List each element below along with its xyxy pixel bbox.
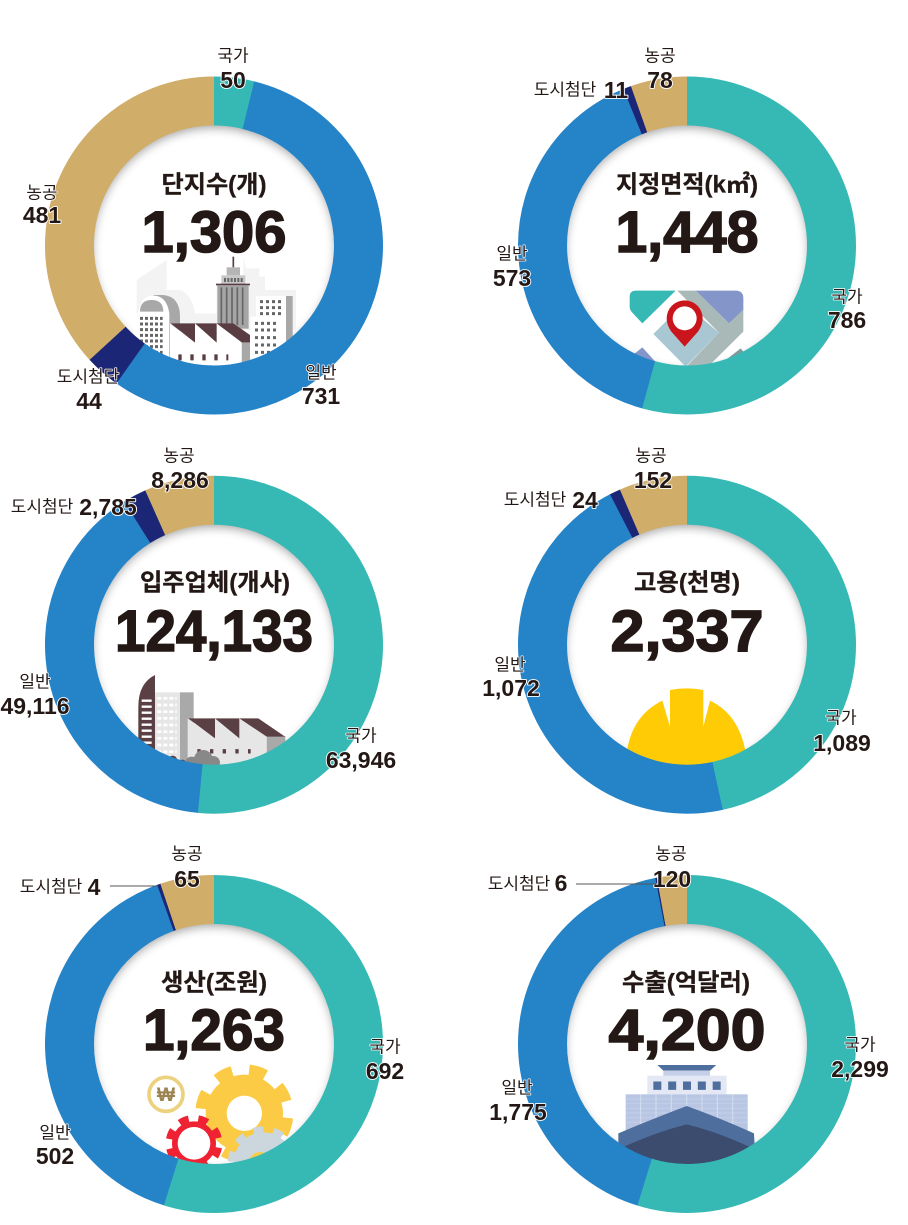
- label: 도시첨단: 2,785: [79, 494, 137, 520]
- label: 국가: 국가: [825, 704, 857, 728]
- label: 도시첨단: [504, 486, 598, 513]
- leader line: 도시첨단: [576, 883, 656, 885]
- label: 농공: 481: [23, 202, 61, 228]
- label: 국가: 2,299: [831, 1056, 889, 1082]
- label: 국가: [828, 282, 866, 333]
- label: 일반: 일반: [39, 1118, 71, 1144]
- label: 일반: 일반: [496, 240, 528, 264]
- label: 일반: [489, 1074, 547, 1125]
- label: 도시첨단: [11, 492, 137, 520]
- label: 일반: [302, 358, 340, 409]
- label: 농공: [653, 840, 691, 892]
- label: 도시첨단: [534, 76, 628, 103]
- panel: 고용 donut: [482, 442, 871, 789]
- label: 농공: 농공: [163, 442, 195, 466]
- label: 농공: [171, 840, 203, 892]
- label: 일반: 일반: [501, 1074, 533, 1098]
- label: 도시첨단: 도시첨단: [534, 76, 597, 100]
- label: 국가: [217, 42, 249, 93]
- title: 생산(조원): [161, 970, 267, 996]
- label: 농공: 농공: [655, 840, 687, 864]
- icon: city and factory: [133, 257, 296, 367]
- label: 국가: 국가: [345, 722, 377, 746]
- label: 도시첨단: 6: [555, 870, 567, 896]
- label: 일반: 731: [302, 383, 340, 409]
- label: 일반: 1,072: [482, 675, 540, 701]
- label: 도시첨단: 44: [76, 388, 102, 414]
- icon: gears and won coin: [149, 1066, 295, 1193]
- label: 도시첨단: 도시첨단: [11, 492, 74, 518]
- label: 국가: [831, 1030, 889, 1082]
- label: 도시첨단: 도시첨단: [57, 362, 120, 388]
- label: 국가: 63,946: [326, 747, 396, 773]
- inner disc with shadow: [94, 125, 334, 366]
- label: 농공: 농공: [644, 42, 676, 66]
- title: 입주업체(개사): [140, 570, 290, 596]
- label: 농공: 65: [174, 866, 200, 892]
- label: 도시첨단: 도시첨단: [488, 870, 551, 894]
- label: 국가: [366, 1032, 404, 1084]
- label: 일반: 일반: [305, 358, 337, 384]
- donut ring: [542, 500, 832, 789]
- donut ring: [70, 900, 358, 1188]
- total value: 124,133: [115, 599, 313, 664]
- label: 도시첨단: 도시첨단: [20, 872, 83, 898]
- label: 농공: 152: [634, 467, 672, 493]
- label: 도시첨단: 4: [88, 874, 101, 900]
- title: 지정면적(k㎡): [616, 170, 758, 198]
- donut ring: [70, 101, 358, 390]
- inner disc with shadow: [566, 524, 808, 765]
- label: 농공: 8,286: [151, 467, 209, 493]
- total value: 2,337: [610, 599, 764, 664]
- label: 국가: 국가: [831, 282, 863, 308]
- label: 일반: [36, 1118, 74, 1169]
- donut ring: [542, 900, 832, 1188]
- label: 국가: 국가: [217, 42, 249, 66]
- label: 농공: [151, 442, 209, 493]
- inner disc with shadow: [566, 924, 808, 1164]
- donut ring: [542, 101, 832, 390]
- label: 국가: 국가: [369, 1032, 401, 1058]
- label: 국가: 692: [366, 1058, 404, 1084]
- panel: 생산 donut: [20, 840, 404, 1193]
- total value: 4,200: [608, 998, 766, 1063]
- panel: 입주업체 donut: [0, 442, 396, 789]
- icon: factory and tower: [138, 675, 285, 770]
- label: 국가: 786: [828, 307, 866, 333]
- title: 수출(억달러): [622, 970, 750, 996]
- inner disc with shadow: [566, 125, 808, 366]
- icon: gears and won coin: ₩: [157, 1085, 176, 1106]
- label: 도시첨단: 도시첨단: [504, 486, 567, 510]
- title: 고용(천명): [634, 570, 740, 596]
- donut ring: [70, 500, 358, 789]
- label: 일반: [0, 668, 70, 719]
- inner disc with shadow: [94, 924, 334, 1164]
- panel: 단지수 donut: [23, 42, 358, 414]
- panel: 수출 donut: [488, 840, 889, 1188]
- total value: 1,263: [143, 998, 285, 1063]
- label: 일반: 1,775: [489, 1099, 547, 1125]
- label: 일반: 일반: [19, 668, 51, 692]
- label: 일반: 502: [36, 1143, 74, 1169]
- label: 농공: 농공: [635, 442, 667, 466]
- label: 농공: 농공: [171, 840, 203, 864]
- label: 농공: 농공: [26, 178, 58, 204]
- label: 농공: [644, 42, 676, 93]
- panel: 지정면적 donut: [493, 42, 866, 390]
- label: 국가: [813, 704, 871, 756]
- label: 국가: 국가: [844, 1030, 876, 1056]
- label: 국가: 50: [220, 67, 246, 93]
- label: 도시첨단: 24: [572, 487, 598, 513]
- icon: cargo ship: [618, 1065, 756, 1167]
- label: 도시첨단: 11: [604, 77, 628, 103]
- label: 일반: 일반: [494, 650, 526, 676]
- label: 일반: 573: [493, 265, 531, 291]
- inner disc with shadow: [94, 524, 334, 765]
- label: 일반: 49,116: [0, 693, 70, 719]
- total value: 1,306: [142, 200, 286, 265]
- label: 국가: 1,089: [813, 730, 871, 756]
- total value: 1,448: [616, 200, 758, 265]
- label: 농공: 120: [653, 866, 691, 892]
- label: 도시첨단: [57, 362, 120, 414]
- label: 농공: [634, 442, 672, 493]
- label: 농공: [23, 178, 61, 228]
- leader line: 도시첨단: [110, 885, 157, 887]
- icon: hard hat: [626, 688, 747, 767]
- label: 일반: [482, 650, 540, 701]
- icon: map pin: [630, 291, 747, 367]
- title: 단지수(개): [162, 172, 266, 198]
- label: 일반: [493, 240, 531, 291]
- label: 농공: 78: [647, 67, 673, 93]
- label: 국가: [326, 722, 396, 773]
